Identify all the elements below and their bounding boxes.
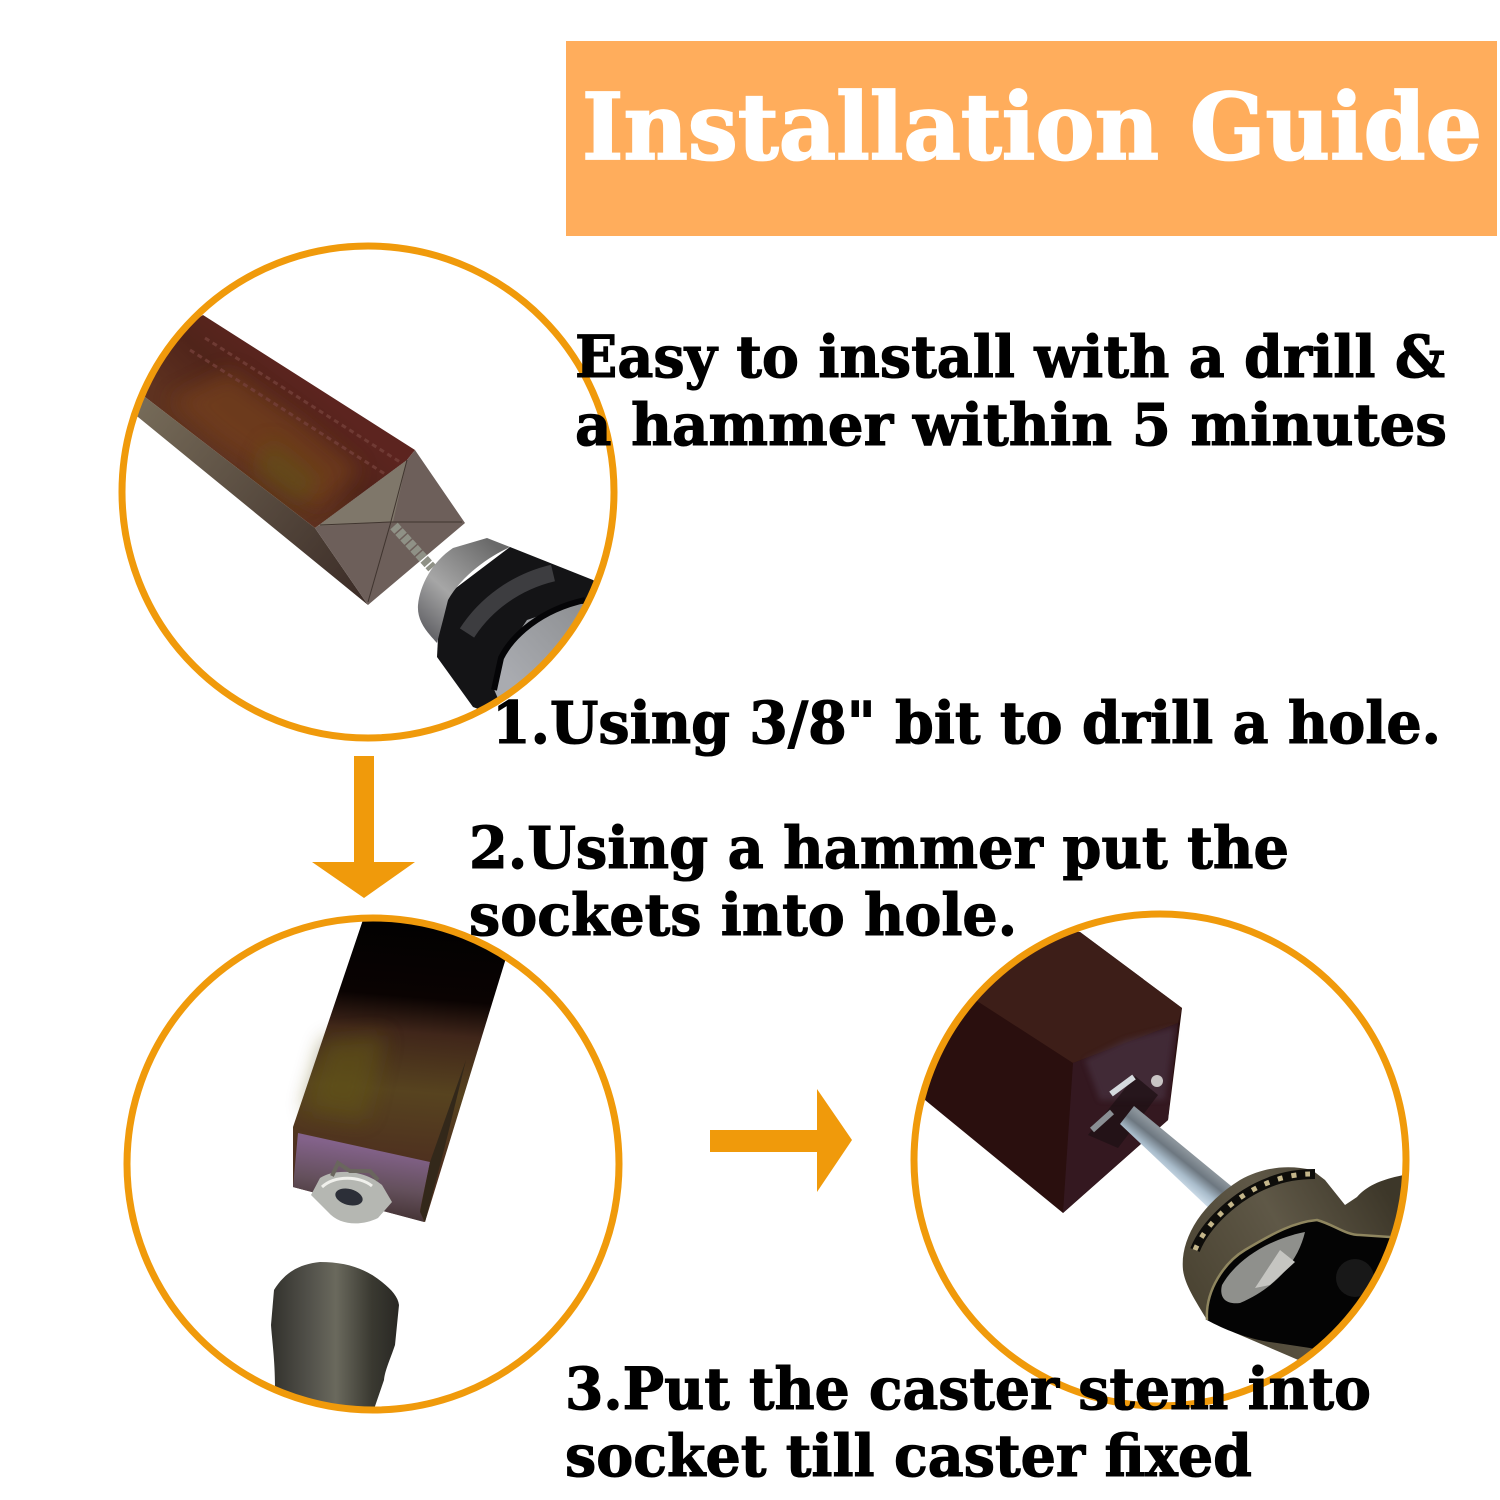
t-nut socket <box>311 1163 392 1223</box>
step 3 text: 3.Put the caster stem into <box>565 1355 1371 1423</box>
title: Installation Guide <box>582 73 1482 181</box>
step 3 text: socket till caster fixed <box>565 1422 1252 1490</box>
step 2 text <box>469 814 1289 949</box>
panel: step 3 fixing caster <box>880 914 1420 1406</box>
step 2 text: 2.Using a hammer put the <box>469 814 1289 882</box>
title banner <box>566 41 1497 236</box>
arrow right <box>710 1089 852 1192</box>
drill chuck and body <box>418 538 594 708</box>
panel: step 1 drilling a hole <box>100 246 620 740</box>
circle outline <box>122 246 614 738</box>
intro text: a hammer within 5 minutes <box>575 391 1447 459</box>
circle outline <box>127 918 619 1410</box>
wooden leg with stem installed <box>925 932 1182 1213</box>
wooden leg with socket <box>293 905 510 1222</box>
step 2 text: sockets into hole. <box>469 881 1017 949</box>
step 3 text <box>565 1355 1371 1490</box>
intro text <box>575 323 1447 459</box>
intro text: Easy to install with a drill & <box>575 323 1445 391</box>
arrow down <box>312 756 415 898</box>
hammer head <box>271 1262 399 1415</box>
drill bit <box>394 526 432 568</box>
wooden leg with drilled end <box>138 315 465 605</box>
step 1 text: 1.Using 3/8" bit to drill a hole. <box>492 689 1441 757</box>
circle outline <box>914 914 1406 1406</box>
caster stem <box>1088 1075 1236 1214</box>
caster wheel and swivel <box>1183 1167 1420 1365</box>
panel: step 2 hammering socket <box>127 905 619 1415</box>
